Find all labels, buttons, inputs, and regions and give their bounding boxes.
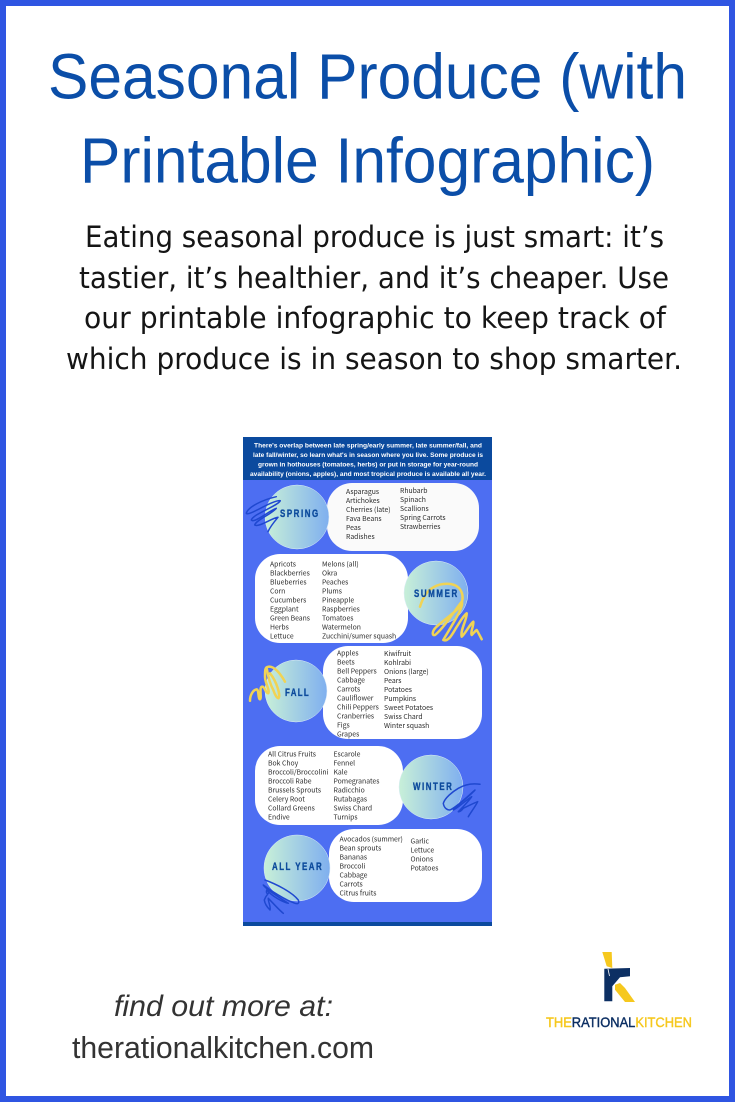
panel: winter: All Citrus Fruits	[268, 748, 316, 758]
panel: fall: Pumpkins	[384, 693, 416, 703]
bottom band	[243, 922, 492, 926]
infographic background	[243, 437, 492, 926]
panel: summer: Blueberries	[270, 576, 307, 586]
panel: all year: Garlic	[410, 836, 430, 846]
panel: summer: Herbs	[270, 622, 289, 632]
panel: fall: Figs	[337, 720, 350, 730]
panel: fall: Potatoes	[384, 684, 412, 694]
panel: summer: Eggplant	[270, 604, 299, 614]
title	[48, 40, 687, 196]
panel: spring: SPRING	[280, 508, 318, 520]
panel: winter: Kale	[334, 766, 348, 776]
call to action: find out more at:	[114, 990, 333, 1023]
panel: winter: Escarole	[334, 748, 361, 758]
infographic	[243, 437, 492, 926]
panel: winter: WINTER	[413, 781, 452, 793]
panel: spring: Cherries (late)	[346, 504, 391, 514]
panel: spring: Scallions	[400, 503, 429, 513]
intro text	[66, 220, 682, 376]
panel: all year: Potatoes	[410, 862, 438, 872]
panel: winter: Rutabagas	[334, 794, 367, 804]
panel: winter: Endive	[268, 812, 290, 822]
intro text: tastier, it’s healthier, and it’s cheaper. Use	[79, 261, 669, 295]
panel: fall: Carrots	[337, 684, 360, 694]
logo wordmark: THERATIONALKITCHEN	[546, 1015, 692, 1030]
panel: summer: Zucchini/sumer squash	[322, 630, 396, 640]
panel: spring: Spring Carrots	[400, 512, 446, 522]
panel: fall: Kohlrabi	[384, 657, 411, 667]
panel: all year: Citrus fruits	[340, 888, 376, 898]
panel: winter	[255, 746, 480, 825]
infographic header: availability (onions, apples), and most tropical produce is available all year.	[250, 471, 486, 478]
call to action: therationalkitchen.com	[72, 1030, 374, 1065]
panel: fall: Winter squash	[384, 720, 429, 730]
panel: all year: Bean sprouts	[340, 842, 381, 852]
intro text: our printable infographic to keep track of	[84, 301, 667, 335]
panel: fall: Chili Peppers	[337, 702, 379, 712]
panel: all year	[263, 829, 482, 913]
call to action	[72, 990, 374, 1065]
panel: summer	[255, 554, 482, 643]
title: Seasonal Produce (with	[48, 40, 687, 112]
panel: all year: Avocados (summer)	[340, 834, 403, 844]
panel: all year: Carrots	[340, 878, 363, 888]
panel: summer: Blackberries	[270, 568, 310, 578]
panel: fall: Kiwifruit	[384, 648, 412, 658]
panel: summer: Plums	[322, 586, 342, 596]
panel: summer: Tomatoes	[322, 612, 353, 622]
panel: spring: Peas	[346, 522, 361, 532]
intro text: which produce is in season to shop smarter.	[66, 342, 682, 376]
panel: spring: Radishes	[346, 531, 375, 541]
panel: winter: Pomegranates	[334, 776, 379, 786]
panel: summer: Green Beans	[270, 612, 310, 622]
panel: summer: Cucumbers	[270, 594, 306, 604]
panel: fall: Sweet Potatoes	[384, 702, 433, 712]
logo	[546, 952, 692, 1030]
panel: winter: Swiss Chard	[334, 802, 372, 812]
panel: summer: Peaches	[322, 576, 348, 586]
panel: all year: ALL YEAR	[272, 861, 322, 873]
infographic header: There's overlap between late spring/early summer, late summer/fall, and	[254, 442, 482, 449]
panel: winter: Bok Choy	[268, 758, 299, 768]
panel: summer: Pineapple	[322, 594, 354, 604]
panel: fall: Swiss Chard	[384, 711, 423, 721]
panel: spring	[246, 483, 479, 551]
panel: fall: Onions (large)	[384, 666, 429, 676]
panel: summer: Melons (all)	[322, 558, 359, 568]
panel: winter: Brussels Sprouts	[268, 784, 321, 794]
panel: all year: Broccoli	[340, 860, 365, 870]
panel: summer: Raspberries	[322, 604, 360, 614]
intro text: Eating seasonal produce is just smart: it’s	[85, 220, 664, 254]
panel: winter: Radicchio	[334, 784, 365, 794]
infographic header: late fall/winter, so learn what's in season where you live. Some produce is	[253, 452, 483, 459]
icon: k mark	[602, 952, 635, 1002]
panel: all year: Bananas	[340, 852, 367, 862]
panel: all year: Cabbage	[340, 870, 368, 880]
panel: fall: Grapes	[337, 728, 359, 738]
panel: fall	[250, 646, 482, 739]
panel: winter: Celery Root	[268, 794, 305, 804]
panel: fall: Bell Peppers	[337, 666, 377, 676]
panel: summer: Okra	[322, 568, 337, 578]
panel: summer: SUMMER	[414, 588, 457, 600]
infographic header: grown in hothouses (tomatoes, herbs) or put in storage for year-round	[258, 462, 478, 468]
panel: summer: Watermelon	[322, 622, 361, 632]
panel: fall: Apples	[337, 648, 359, 658]
panel: spring: Artichokes	[346, 495, 380, 505]
title: Printable Infographic)	[80, 124, 655, 196]
infographic header	[243, 437, 492, 480]
panel: spring: Strawberries	[400, 521, 440, 531]
panel: spring: Asparagus	[346, 486, 379, 496]
panel: spring: Rhubarb	[400, 485, 428, 495]
panel: winter: Broccoli Rabe	[268, 776, 312, 786]
panel: summer: Apricots	[270, 558, 296, 568]
panel: spring: Spinach	[400, 494, 426, 504]
panel: winter: Turnips	[334, 812, 358, 822]
panel: winter: Collard Greens	[268, 802, 315, 812]
panel: fall: Cranberries	[337, 710, 374, 720]
panel: fall: Pears	[384, 675, 402, 685]
panel: fall: Beets	[337, 656, 355, 666]
panel: summer: Corn	[270, 586, 285, 596]
panel: all year: Lettuce	[410, 844, 434, 854]
panel: all year: Onions	[410, 854, 433, 864]
panel: fall: FALL	[285, 687, 309, 699]
panel: spring: Fava Beans	[346, 513, 382, 523]
panel: fall: Cabbage	[337, 674, 365, 684]
panel: winter: Fennel	[334, 758, 355, 768]
panel: fall: Cauliflower	[337, 692, 374, 702]
panel: summer: Lettuce	[270, 630, 294, 640]
panel: winter: Broccoli/Broccolini	[268, 766, 329, 776]
